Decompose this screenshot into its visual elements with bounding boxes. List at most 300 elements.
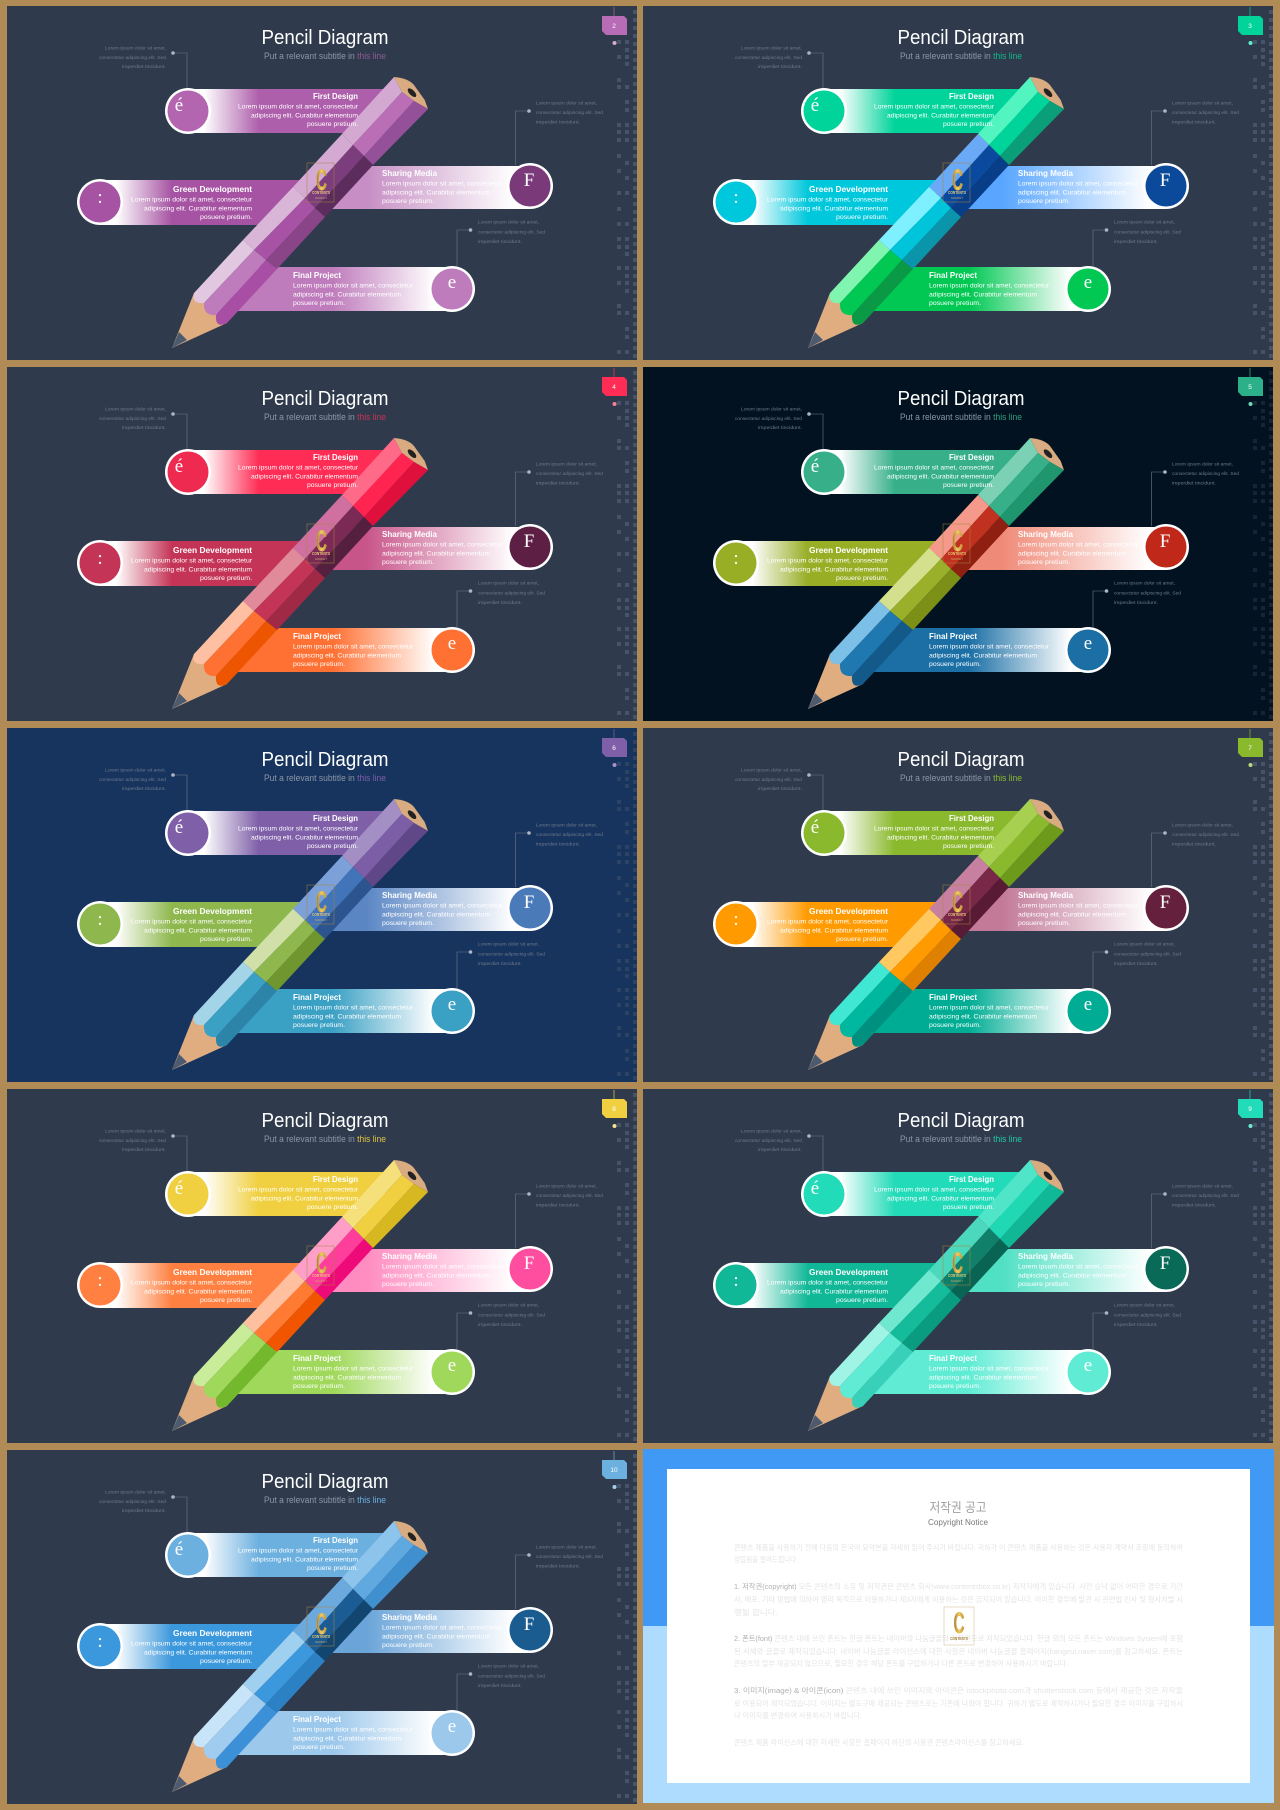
ribbon: green development [713, 1262, 936, 1308]
text: first design [238, 452, 359, 489]
logo: CONTENTS [950, 1636, 968, 1641]
text: green development: adipiscing elit. Curabitur elementum [144, 566, 253, 574]
text: first design: First Design [949, 91, 994, 101]
title: Pencil Diagram [898, 749, 1024, 771]
logo: MARKET [951, 918, 963, 922]
text: green development: Green Development [809, 545, 888, 555]
ribbon: sharing media [961, 524, 1189, 570]
text: sharing media: Sharing Media [382, 890, 437, 900]
ribbon: green development [77, 540, 300, 586]
text: first design: Lorem ipsum dolor sit amet, consectetur [874, 104, 995, 110]
text: sharing media [382, 890, 503, 927]
text: sharing media: posuere pretium. [382, 920, 434, 927]
text: first design: posuere pretium. [943, 1204, 994, 1211]
ribbon: first design: é [175, 456, 183, 477]
text: sharing media: adipiscing elit. Curabitur elementum [1018, 550, 1127, 558]
ribbon: green development: : [97, 187, 103, 208]
text: final project: Final Project [293, 992, 341, 1002]
subtitle: Put a relevant subtitle in this line [264, 412, 386, 422]
side note: final: imperdiet tincidunt. [478, 961, 522, 966]
text: green development: posuere pretium. [200, 214, 252, 221]
side note: final: consectetur adipiscing elit. Sed [1114, 952, 1182, 956]
ribbon: sharing media [961, 163, 1189, 209]
subtitle: Put a relevant subtitle in this line [264, 51, 386, 61]
text: sharing media: posuere pretium. [1018, 559, 1070, 566]
text: green development [131, 545, 253, 582]
side note: final: consectetur adipiscing elit. Sed [1114, 590, 1182, 596]
side note: final: consectetur adipiscing elit. Sed [478, 590, 546, 596]
text: final project [929, 1353, 1050, 1390]
side note: sharing: imperdiet tincidunt. [1172, 120, 1216, 124]
text: sharing media: adipiscing elit. Curabitur elementum [382, 912, 491, 918]
subtitle: Put a relevant subtitle in this line [264, 1495, 386, 1505]
logo: CONTENTS [948, 1273, 966, 1278]
ribbon: final project [871, 266, 1111, 312]
logo [943, 163, 970, 202]
side note: first [99, 1490, 167, 1513]
text: sharing media: adipiscing elit. Curabitur elementum [382, 1634, 491, 1640]
text: green development: adipiscing elit. Curabitur elementum [144, 1650, 253, 1656]
ribbon: final project: e [1084, 994, 1092, 1015]
text: green development: Green Development [809, 906, 888, 916]
page tag [1238, 729, 1263, 767]
text: final project [929, 631, 1050, 668]
ribbon: first design: é [175, 1539, 183, 1560]
text: first design: posuere pretium. [307, 1204, 358, 1211]
panel: slide 4 red [7, 367, 637, 721]
text: final project: adipiscing elit. Curabitur elementum [293, 652, 402, 660]
text: first design: adipiscing elit. Curabitur elementum [251, 474, 359, 480]
side note: first: imperdiet tincidunt. [758, 64, 802, 69]
text: final project: Final Project [293, 1714, 341, 1724]
panel: slide 8 yellow pink [7, 1089, 637, 1443]
text: first design [238, 91, 359, 128]
side note: sharing [536, 462, 604, 486]
logo [307, 1246, 334, 1285]
ribbon: final project: e [448, 994, 456, 1015]
text: green development: posuere pretium. [836, 1297, 888, 1304]
logo: C [316, 164, 327, 197]
text: final project: posuere pretium. [293, 1022, 345, 1029]
panel: slide 10 blue [7, 1450, 637, 1804]
ribbon: sharing media: F [1160, 892, 1170, 913]
text: first design: Lorem ipsum dolor sit amet, consectetur [238, 1186, 359, 1194]
text: green development: Lorem ipsum dolor sit amet, consectetur [131, 558, 253, 564]
logo: MARKET [951, 196, 963, 200]
ribbon: final project: e [448, 272, 456, 293]
text: sharing media: Sharing Media [382, 168, 437, 178]
text: sharing media [382, 1251, 503, 1288]
side note: sharing [1172, 100, 1240, 124]
text: sharing media: Lorem ipsum dolor sit amet, consectetur [382, 1624, 503, 1632]
text: green development: Lorem ipsum dolor sit amet, consectetur [767, 918, 889, 926]
page tag [1238, 1090, 1263, 1128]
text: final project: Lorem ipsum dolor sit amet, consectetur [929, 1366, 1050, 1372]
side note: first [99, 768, 167, 791]
text: final project: posuere pretium. [929, 1383, 981, 1390]
pencil [172, 438, 428, 709]
panel: slide 6 royal blue [7, 728, 637, 1082]
side note: sharing [536, 100, 604, 124]
ribbon: green development: : [97, 1270, 103, 1291]
ribbon: sharing media [325, 1607, 553, 1653]
side note: final [478, 942, 546, 966]
side note: final: consectetur adipiscing elit. Sed [478, 230, 546, 234]
text: green development [767, 1267, 889, 1304]
text: sharing media [382, 168, 503, 205]
side note: final: imperdiet tincidunt. [1114, 239, 1158, 244]
ribbon: final project [235, 627, 475, 673]
ribbon: first design: é [175, 95, 183, 116]
text: first design [238, 813, 359, 850]
text: final project: posuere pretium. [929, 661, 981, 668]
side note: first: consectetur adipiscing elit. Sed [735, 416, 803, 421]
ribbon: sharing media [961, 885, 1189, 931]
side note: first: consectetur adipiscing elit. Sed [735, 55, 803, 60]
text: first design: Lorem ipsum dolor sit amet, consectetur [238, 826, 359, 832]
side note: final: consectetur adipiscing elit. Sed [478, 952, 546, 956]
text: final project: posuere pretium. [293, 1744, 345, 1751]
text: sharing media: posuere pretium. [382, 1642, 434, 1649]
text: sharing media [1018, 168, 1139, 205]
text: sharing media: Lorem ipsum dolor sit amet, consectetur [1018, 180, 1139, 188]
side note: first: Lorem ipsum dolor sit amet, [105, 768, 166, 772]
text: final project: Lorem ipsum dolor sit amet, consectetur [293, 644, 414, 650]
side note: final: imperdiet tincidunt. [1114, 600, 1158, 605]
text: sharing media [1018, 529, 1139, 566]
text: first design: First Design [313, 1535, 358, 1545]
text: final project: posuere pretium. [293, 661, 345, 668]
side note: sharing: Lorem ipsum dolor sit amet, [1172, 462, 1233, 466]
ribbon: first design: é [175, 817, 183, 838]
title: Pencil Diagram [898, 388, 1024, 410]
side note: first [735, 406, 803, 430]
side note: sharing: consectetur adipiscing elit. Sed [536, 1554, 604, 1559]
title: Pencil Diagram [262, 1110, 388, 1132]
panel: slide 2 purple [7, 6, 637, 360]
text: green development: posuere pretium. [200, 936, 252, 943]
title: Pencil Diagram [262, 749, 388, 771]
text: first design [874, 91, 995, 128]
logo [943, 1246, 970, 1285]
text: final project: adipiscing elit. Curabitur elementum [929, 292, 1038, 298]
page tag [602, 368, 627, 406]
side note: sharing: consectetur adipiscing elit. Sed [536, 832, 604, 837]
side note: sharing: imperdiet tincidunt. [536, 120, 580, 124]
subtitle: Put a relevant subtitle in this line [900, 1134, 1022, 1144]
side note: final [1114, 220, 1182, 244]
side note: first: imperdiet tincidunt. [758, 786, 802, 791]
text: green development: Green Development [173, 184, 252, 194]
title: Pencil Diagram [262, 27, 388, 49]
side note: final: Lorem ipsum dolor sit amet, [1114, 942, 1175, 946]
text: sharing media: Sharing Media [382, 1251, 437, 1261]
ribbon: sharing media: F [1160, 531, 1170, 552]
title: Pencil Diagram [898, 27, 1024, 49]
text: green development: Lorem ipsum dolor sit amet, consectetur [131, 918, 253, 926]
logo: CONTENTS [948, 551, 966, 556]
ribbon: green development [77, 179, 300, 225]
text: green development: posuere pretium. [200, 1297, 252, 1304]
text: first design [238, 1174, 359, 1211]
text: final project: adipiscing elit. Curabitur elementum [293, 1736, 402, 1742]
text: first design: First Design [949, 813, 994, 823]
ribbon: first design [801, 810, 1021, 856]
text: final project: Final Project [929, 992, 977, 1002]
side note: sharing: Lorem ipsum dolor sit amet, [1172, 822, 1233, 828]
copyright body text: 1. 저작권(copyright) 모든 콘텐츠의 소유 및 저작권은 콘텐츠 회사(www.contentsbox.co.kr) 저작자에게 있습니다. 사전 승낙 없이 어떠한 경우로 기간 [734, 1581, 1183, 1591]
ribbon: green development: : [97, 548, 103, 569]
page tag: 6 [612, 745, 616, 752]
text: final project [929, 992, 1050, 1029]
text: green development: adipiscing elit. Curabitur elementum [780, 928, 889, 934]
side note: first: consectetur adipiscing elit. Sed [735, 777, 803, 782]
side note: final: Lorem ipsum dolor sit amet, [478, 220, 539, 224]
text: green development: Green Development [809, 184, 888, 194]
side note: sharing [536, 822, 604, 846]
ribbon: final project [235, 266, 475, 312]
text: final project: Final Project [293, 631, 341, 641]
text: green development: Lorem ipsum dolor sit amet, consectetur [767, 558, 889, 564]
page tag [602, 7, 627, 45]
text: first design: First Design [313, 813, 358, 823]
text: final project: Lorem ipsum dolor sit amet, consectetur [293, 1726, 414, 1734]
text: green development: adipiscing elit. Curabitur elementum [144, 928, 253, 934]
ribbon: final project [871, 1349, 1111, 1395]
text: first design: posuere pretium. [943, 482, 994, 489]
text: first design [238, 1535, 359, 1572]
side note: sharing: consectetur adipiscing elit. Sed [1172, 471, 1240, 476]
side note: sharing [1172, 462, 1240, 486]
pencil [172, 1160, 428, 1431]
text: green development: posuere pretium. [836, 936, 888, 943]
text: green development: posuere pretium. [836, 214, 888, 221]
text: sharing media: adipiscing elit. Curabitur elementum [382, 1272, 491, 1280]
pencil [808, 799, 1064, 1070]
ribbon: sharing media [325, 524, 553, 570]
side note: final: imperdiet tincidunt. [1114, 961, 1158, 966]
side note: first [735, 46, 803, 69]
text: final project: Final Project [293, 270, 341, 280]
logo: C [952, 164, 963, 197]
text: final project: adipiscing elit. Curabitur elementum [929, 1014, 1038, 1020]
side note: sharing: consectetur adipiscing elit. Sed [1172, 110, 1240, 115]
side note: first [735, 768, 803, 791]
side note: first [99, 46, 167, 69]
text: first design [874, 452, 995, 489]
text: first design: posuere pretium. [307, 121, 358, 128]
text: sharing media [1018, 890, 1139, 927]
text: sharing media: Lorem ipsum dolor sit amet, consectetur [1018, 1264, 1139, 1270]
ribbon: sharing media [325, 1246, 553, 1292]
text: final project: adipiscing elit. Curabitur elementum [929, 1374, 1038, 1382]
ribbon: green development: : [733, 187, 739, 208]
logo: MARKET [315, 918, 327, 922]
text: green development: adipiscing elit. Curabitur elementum [780, 1288, 889, 1296]
side note: final: consectetur adipiscing elit. Sed [478, 1674, 546, 1678]
side note: sharing: imperdiet tincidunt. [1172, 842, 1216, 846]
ribbon: green development: : [733, 1270, 739, 1291]
side note: sharing: imperdiet tincidunt. [1172, 1202, 1216, 1208]
ribbon: first design: é [175, 1178, 183, 1199]
text: sharing media: posuere pretium. [382, 1281, 434, 1288]
text: final project: Lorem ipsum dolor sit amet, consectetur [293, 1366, 414, 1372]
text: sharing media: Lorem ipsum dolor sit amet, consectetur [382, 542, 503, 548]
text: final project: Lorem ipsum dolor sit amet, consectetur [293, 1004, 414, 1012]
logo: C [954, 1607, 964, 1640]
side note: sharing [536, 1544, 604, 1568]
logo [943, 524, 970, 563]
text: sharing media: adipiscing elit. Curabitur elementum [1018, 1272, 1127, 1280]
side note: first: imperdiet tincidunt. [122, 1508, 166, 1513]
copyright body text: 된 서체와 글꼴로 제작되었습니다. 네이버 나눔글꼴 라이선스에 대한 사항은 네이버 나눔글꼴 홈페이지(hangeul.naver.com)를 참고하세요. 폰트는 [734, 1646, 1183, 1656]
text: sharing media: Lorem ipsum dolor sit amet, consectetur [1018, 902, 1139, 910]
text: final project: adipiscing elit. Curabitur elementum [929, 652, 1038, 660]
text: first design: adipiscing elit. Curabitur elementum [887, 112, 995, 120]
ribbon: first design: é [811, 1178, 819, 1199]
ribbon: final project [235, 1349, 475, 1395]
copyright body text: 3. 이미지(image) & 아이콘(icon) 콘텐츠 내에 쓰인 이미지와 아이콘은 istockphoto.com과 shutterstock.com 등에서 제공한 것은 저작물 [734, 1685, 1183, 1695]
ribbon: sharing media: F [1160, 170, 1170, 191]
text: sharing media: Sharing Media [382, 529, 437, 539]
panel: slide 3 green blue [643, 6, 1273, 360]
text: final project [293, 1353, 414, 1390]
subtitle: Put a relevant subtitle in this line [264, 773, 386, 783]
ribbon: final project [871, 627, 1111, 673]
text: first design: First Design [313, 1174, 358, 1184]
logo: CONTENTS [312, 551, 330, 556]
copyright body text [734, 1542, 1183, 1747]
text: sharing media: posuere pretium. [382, 198, 434, 205]
ribbon: final project: e [448, 1716, 456, 1737]
ribbon: first design [801, 88, 1021, 134]
logo: CONTENTS [312, 1273, 330, 1278]
side note: first: Lorem ipsum dolor sit amet, [741, 46, 802, 50]
text: first design: Lorem ipsum dolor sit amet, consectetur [874, 464, 995, 472]
side note: first: imperdiet tincidunt. [758, 425, 802, 430]
text: final project [293, 992, 414, 1029]
text: green development: posuere pretium. [200, 1658, 252, 1665]
ribbon: first design [165, 449, 385, 495]
ribbon: first design [165, 810, 385, 856]
text: sharing media: Sharing Media [1018, 1251, 1073, 1261]
ribbon: first design: é [811, 817, 819, 838]
ribbon: green development [77, 901, 300, 947]
logo: MARKET [315, 557, 327, 561]
text: final project [293, 631, 414, 668]
ribbon: sharing media [325, 163, 553, 209]
text: sharing media: Sharing Media [1018, 529, 1073, 539]
ribbon: green development [713, 901, 936, 947]
text: final project: posuere pretium. [293, 1383, 345, 1390]
side note: final [1114, 942, 1182, 966]
ribbon: final project: e [1084, 1355, 1092, 1376]
logo: C [316, 886, 327, 919]
ribbon: green development [77, 1623, 300, 1669]
side note: final: Lorem ipsum dolor sit amet, [478, 942, 539, 946]
side note: sharing [1172, 1184, 1240, 1208]
subtitle: Put a relevant subtitle in this line [900, 51, 1022, 61]
page tag: 7 [1248, 745, 1252, 752]
page tag: 5 [1248, 384, 1252, 391]
side note: final: imperdiet tincidunt. [1114, 1322, 1158, 1327]
side note: first [735, 1128, 803, 1152]
side note: final [478, 1302, 546, 1327]
page tag: 8 [612, 1106, 616, 1113]
side note: first: consectetur adipiscing elit. Sed [99, 1499, 167, 1504]
text: first design: adipiscing elit. Curabitur elementum [887, 834, 995, 842]
side note: first: Lorem ipsum dolor sit amet, [741, 768, 802, 772]
ribbon: green development: : [97, 1631, 103, 1652]
ribbon: final project: e [1084, 633, 1092, 654]
ribbon: final project [235, 988, 475, 1034]
text: first design: Lorem ipsum dolor sit amet, consectetur [238, 104, 359, 110]
page tag: 2 [612, 23, 616, 30]
side note: sharing: consectetur adipiscing elit. Sed [536, 110, 604, 115]
text: final project: Lorem ipsum dolor sit amet, consectetur [929, 644, 1050, 650]
text: green development: Green Development [173, 545, 252, 555]
text: final project: adipiscing elit. Curabitur elementum [293, 1014, 402, 1020]
ribbon: sharing media [961, 1246, 1189, 1292]
logo [307, 1607, 334, 1646]
side note: sharing: consectetur adipiscing elit. Sed [536, 471, 604, 476]
side note: first: Lorem ipsum dolor sit amet, [741, 406, 802, 412]
logo: CONTENTS [948, 190, 966, 195]
side note: sharing: Lorem ipsum dolor sit amet, [1172, 1184, 1233, 1188]
text: final project: adipiscing elit. Curabitur elementum [293, 292, 402, 298]
ribbon: first design [165, 1532, 385, 1578]
text: sharing media [382, 529, 503, 566]
text: sharing media: Lorem ipsum dolor sit amet, consectetur [382, 902, 503, 910]
side note: sharing: Lorem ipsum dolor sit amet, [1172, 100, 1233, 106]
side note: sharing [536, 1184, 604, 1208]
text: first design: Lorem ipsum dolor sit amet, consectetur [238, 1548, 359, 1554]
side note: first: imperdiet tincidunt. [122, 425, 166, 430]
text: green development [131, 1628, 253, 1665]
text: first design: adipiscing elit. Curabitur elementum [251, 112, 359, 120]
side note: first: imperdiet tincidunt. [122, 64, 166, 69]
text: final project: posuere pretium. [929, 1022, 981, 1029]
side note: final: Lorem ipsum dolor sit amet, [478, 1664, 539, 1668]
side note: first: imperdiet tincidunt. [122, 786, 166, 791]
side note: final: Lorem ipsum dolor sit amet, [1114, 580, 1175, 586]
text: final project [293, 1714, 414, 1751]
text: sharing media: Sharing Media [1018, 890, 1073, 900]
ribbon: sharing media: F [524, 170, 534, 191]
text: final project: Lorem ipsum dolor sit amet, consectetur [929, 282, 1050, 290]
text: sharing media: Sharing Media [382, 1612, 437, 1622]
text: first design: posuere pretium. [307, 843, 358, 850]
copyright body text: 성립됨을 알려드립니다. [734, 1554, 798, 1564]
copyright body text: 콘텐츠의 일부 제공되지 않으므로, 필요한 경우 해당 폰트를 구입하거나 다른 폰트로 변경하여 사용하시기 바랍니다. [734, 1658, 1068, 1668]
side note: first: Lorem ipsum dolor sit amet, [105, 1128, 166, 1134]
copyright body text: 나 이미지를 변경하여 사용하시기 바랍니다. [734, 1710, 862, 1720]
title: Pencil Diagram [898, 1110, 1024, 1132]
logo: C [952, 886, 963, 919]
logo: MARKET [315, 1279, 327, 1283]
text: final project [293, 270, 414, 307]
side note: sharing [1172, 822, 1240, 846]
side note: sharing: consectetur adipiscing elit. Sed [536, 1193, 604, 1198]
side note: sharing: imperdiet tincidunt. [536, 1564, 580, 1568]
side note: sharing: consectetur adipiscing elit. Sed [1172, 1193, 1240, 1198]
text: first design: First Design [949, 452, 994, 462]
text: green development: Lorem ipsum dolor sit amet, consectetur [767, 196, 889, 204]
page tag [1238, 368, 1263, 406]
side note: final: Lorem ipsum dolor sit amet, [1114, 220, 1175, 224]
side note: first: consectetur adipiscing elit. Sed [99, 416, 167, 421]
text: first design: adipiscing elit. Curabitur elementum [251, 834, 359, 842]
